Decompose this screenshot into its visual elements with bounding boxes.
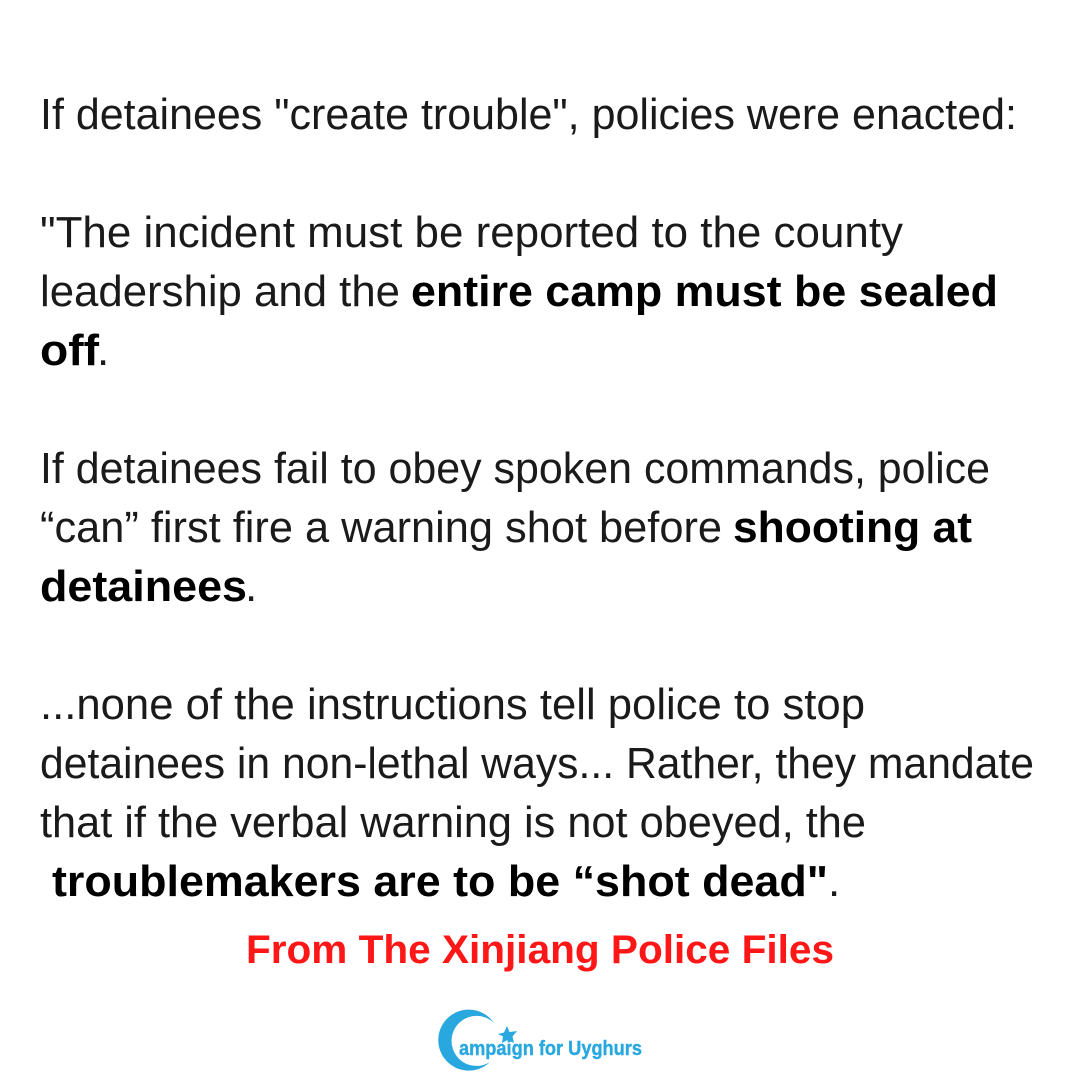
text block: instructions: detainees in non-lethal ways... Rather, they mandate <box>40 739 1034 788</box>
text block: instructions: that if the verbal warning is not obeyed, the <box>40 798 866 847</box>
text block: incident report quote: "The incident must be reported to the county <box>40 208 903 257</box>
logo text: ampaign for Uyghurs <box>459 1038 642 1060</box>
logo: Campaign for Uyghurs <box>438 1010 642 1071</box>
text block: incident report quote <box>40 208 998 375</box>
text block: spoken commands: detainees <box>40 562 247 611</box>
heading text: If detainees "create trouble", policies were enacted: <box>40 90 1017 139</box>
text block: incident report quote: leadership and the <box>40 267 400 316</box>
text block: spoken commands: . <box>245 562 257 611</box>
text block: instructions: . <box>828 857 840 906</box>
text block: spoken commands: “can” first fire a warning shot before <box>40 503 722 552</box>
text block: spoken commands: shooting at <box>733 503 972 552</box>
text block: instructions <box>40 680 1034 906</box>
source line: From The Xinjiang Police Files <box>246 928 834 972</box>
icon: star <box>498 1026 517 1043</box>
text block: incident report quote: off <box>40 326 99 375</box>
text block: spoken commands: If detainees fail to obey spoken commands, police <box>40 444 990 493</box>
text block: incident report quote: . <box>97 326 109 375</box>
text block: instructions: troublemakers are to be “shot dead" <box>52 857 828 906</box>
text block: spoken commands <box>40 444 990 611</box>
text block: incident report quote: entire camp must be sealed <box>411 267 998 316</box>
text block: instructions: ...none of the instructions tell police to stop <box>40 680 865 729</box>
icon: crescent <box>438 1010 494 1071</box>
